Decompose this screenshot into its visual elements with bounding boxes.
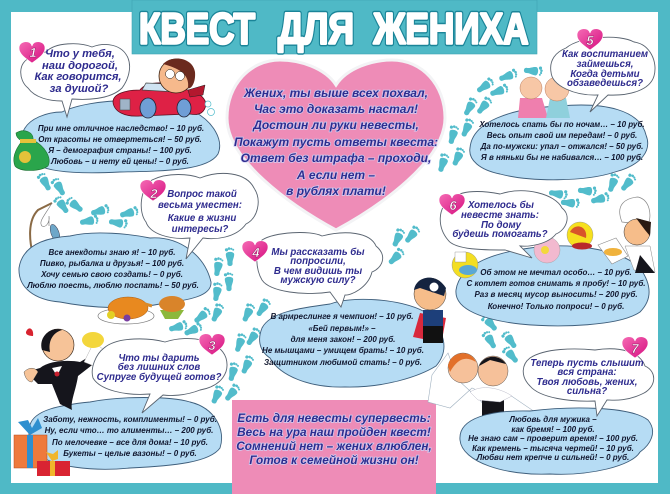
footprints trail xyxy=(36,65,637,405)
number heart 6 xyxy=(439,194,465,215)
icon: gift boxes xyxy=(14,418,70,476)
answers bubble 5: Я в няньки бы не набивался… – 100 руб. xyxy=(480,153,643,162)
question bubble 4: мужскую силу? xyxy=(280,275,356,286)
question bubble 4: В чем видишь ты xyxy=(274,266,363,277)
quest 6 xyxy=(439,191,655,326)
answers bubble 5: Хотелось спать бы по ночам… – 10 руб. xyxy=(478,120,645,129)
answers bubble 7: Не знаю сам – проверит время! – 100 руб. xyxy=(468,434,638,443)
number heart 1: 1 xyxy=(29,45,37,60)
question bubble 4: Мы рассказать бы xyxy=(271,247,365,258)
answers bubble 2: Хочу семью свою создать! – 0 руб. xyxy=(40,270,183,279)
answers bubble 6: Раз в месяц мусор выносить! – 200 руб. xyxy=(474,290,638,299)
answers bubble 1: При мне отличное наследство! – 10 руб. xyxy=(38,124,204,133)
question bubble 6: невесте знать: xyxy=(461,210,539,221)
question bubble 7: Теперь пусть слышит xyxy=(530,358,644,369)
title: ЖЕНИХА xyxy=(373,4,528,54)
icon: fishing rod and fish xyxy=(30,203,64,262)
number heart 7: 7 xyxy=(631,341,639,356)
answers bubble 2: Люблю поесть, люблю поспать! – 50 руб. xyxy=(26,281,199,290)
number heart 2 xyxy=(140,180,166,201)
answers bubble 1 xyxy=(22,100,220,173)
quest 3 xyxy=(14,328,227,476)
question bubble 3: без лишних слов xyxy=(118,362,200,373)
question bubble 5: займешься, xyxy=(577,59,633,70)
answers bubble 1: Любовь – и нету ей цены! – 0 руб. xyxy=(50,157,189,166)
heart poem: А если нет – xyxy=(296,168,375,182)
title: КВЕСТ xyxy=(139,4,255,54)
title: ДЛЯ xyxy=(278,4,354,54)
number heart 7 xyxy=(622,337,648,358)
question bubble 7: сильна? xyxy=(567,386,607,397)
icon: roast turkey on a plate xyxy=(98,296,185,324)
icon: food and kitchen circles xyxy=(452,222,593,278)
question bubble 6: Хотелось бы xyxy=(467,200,535,211)
closing verse pink panel: Весь на ура наш пройден квест! xyxy=(237,425,431,439)
number heart 4 xyxy=(242,241,268,262)
answers bubble 7: Как кремень – тысяча чертей! – 10 руб. xyxy=(472,444,634,453)
number heart 6: 6 xyxy=(449,198,457,213)
question bubble 1 xyxy=(21,44,130,117)
question bubble 2: Какие в жизни xyxy=(168,213,236,224)
central heart xyxy=(227,60,445,230)
answers bubble 3: По мелочевке – все для дома! – 10 руб. xyxy=(52,438,208,447)
number heart 5 xyxy=(577,29,603,50)
answers bubble 5 xyxy=(470,77,648,180)
question bubble 7: Твоя любовь, жених, xyxy=(536,377,638,388)
answers bubble 7: Любовь для мужика – xyxy=(508,415,597,424)
icon: groom with bouquet xyxy=(24,328,104,410)
question bubble 3: Что ты дарить xyxy=(118,353,200,364)
question bubble 5 xyxy=(551,37,655,112)
question bubble 6 xyxy=(440,191,567,258)
question bubble 2: Вопрос такой xyxy=(167,189,237,200)
answers bubble 6 xyxy=(456,246,649,326)
heart poem: в рублях плати! xyxy=(286,184,386,198)
closing verse pink panel xyxy=(232,400,436,494)
closing verse pink panel: Есть для невесты супервесть: xyxy=(237,411,431,425)
heart poem: Покажут пусть ответы квеста: xyxy=(234,135,438,149)
question bubble 4 xyxy=(257,233,383,307)
answers bubble 6: Конечно! Только попроси! – 0 руб. xyxy=(488,302,624,311)
question bubble 6: будешь помогать? xyxy=(452,229,548,240)
question bubble 4: попросили, xyxy=(290,256,346,267)
number heart 3: 3 xyxy=(208,338,216,353)
answers bubble 3: Букеты – целые вазоны! – 0 руб. xyxy=(63,449,197,458)
title xyxy=(132,0,537,54)
answers bubble 3: Заботу, нежность, комплименты! – 0 руб. xyxy=(43,415,217,424)
answers bubble 4: Не мышцами – умищем брать! – 10 руб. xyxy=(262,346,424,355)
icon: groom carrying bride xyxy=(428,353,535,423)
number heart 5: 5 xyxy=(586,33,594,48)
answers bubble 6: С котлет готов снимать я пробу! – 10 руб. xyxy=(466,279,646,288)
quest 2 xyxy=(19,173,258,324)
closing verse pink panel: Готов к семейной жизни он! xyxy=(249,453,419,467)
number heart 2: 2 xyxy=(149,186,158,201)
heart poem xyxy=(234,86,438,198)
answers bubble 4: «Бей первым!» – xyxy=(308,324,376,333)
answers bubble 1: Я – демография страны! – 100 руб. xyxy=(47,146,192,155)
answers bubble 7 xyxy=(460,408,653,474)
answers bubble 4: В армреслинге я чемпион! – 10 руб. xyxy=(270,312,414,321)
icon: chef with pizza box xyxy=(598,197,655,273)
question bubble 5: Когда детьми xyxy=(570,69,640,80)
heart poem: Ответ без штрафа – проходи, xyxy=(241,151,431,165)
question bubble 1: Что у тебя, xyxy=(45,48,115,60)
quest 4 xyxy=(242,233,446,387)
question bubble 5: обзаведешься? xyxy=(567,78,643,89)
answers bubble 5: Весь опыт свой им передам! – 0 руб. xyxy=(487,131,637,140)
answers bubble 4: Защитником любимой стать! – 0 руб. xyxy=(264,358,422,367)
title: ДЛЯ xyxy=(278,4,354,54)
quest 5 xyxy=(470,29,655,180)
question bubble 1: наш дорогой, xyxy=(42,60,118,72)
icon: superhero xyxy=(413,278,446,343)
quest 1 xyxy=(14,42,220,173)
answers bubble 2: Все анекдоты знаю я! – 10 руб. xyxy=(49,248,175,257)
number heart 1 xyxy=(19,42,45,63)
answers bubble 7: как бремя! – 100 руб. xyxy=(511,425,595,434)
question bubble 3: Супруге будущей готов? xyxy=(97,372,221,383)
answers bubble 5: Да по-мужски: упал – отжался! – 50 руб. xyxy=(480,142,643,151)
closing verse pink panel: Сомнений нет – жених влюблен, xyxy=(236,439,432,453)
answers bubble 2: Пивко, рыбалка и друзья! – 100 руб. xyxy=(40,259,184,268)
heart poem: Жених, ты выше всех похвал, xyxy=(243,86,428,100)
question bubble 7: вся страна: xyxy=(557,367,617,378)
question bubble 2: весьма уместен: xyxy=(158,200,242,211)
heart poem: Достоин ли руки невесты, xyxy=(252,118,419,132)
icon: red car with driver xyxy=(113,58,214,118)
title: ЖЕНИХА xyxy=(373,4,528,54)
question bubble 7 xyxy=(523,349,654,416)
answers bubble 1: От красоты не отвертеться! – 50 руб. xyxy=(38,135,202,144)
icon: two babies xyxy=(518,77,570,118)
number heart 4: 4 xyxy=(251,245,260,260)
icon: money bag xyxy=(14,131,49,170)
title: КВЕСТ xyxy=(139,4,255,54)
question bubble 3 xyxy=(92,339,227,413)
answers bubble 4: для меня закон! – 200 руб. xyxy=(291,335,395,344)
question bubble 5: Как воспитанием xyxy=(562,49,648,60)
question bubble 6: По дому xyxy=(481,220,522,231)
answers bubble 6: Об этом не мечтал особо… – 10 руб. xyxy=(480,268,632,277)
question bubble 1: Как говорится, xyxy=(34,71,122,83)
number heart 3 xyxy=(199,334,225,355)
answers bubble 4 xyxy=(260,299,444,387)
quest 7 xyxy=(428,337,654,474)
answers bubble 3 xyxy=(29,398,222,469)
heart poem: Час это доказать настал! xyxy=(254,102,418,116)
answers bubble 3: Ну, если что… то алименты… – 200 руб. xyxy=(45,426,213,435)
question bubble 2 xyxy=(141,173,258,259)
question bubble 1: за душой? xyxy=(50,83,108,95)
answers bubble 7: Любви нет крепче и сильней! – 0 руб. xyxy=(476,453,629,462)
answers bubble 2 xyxy=(19,233,211,308)
question bubble 2: интересы? xyxy=(172,224,228,235)
